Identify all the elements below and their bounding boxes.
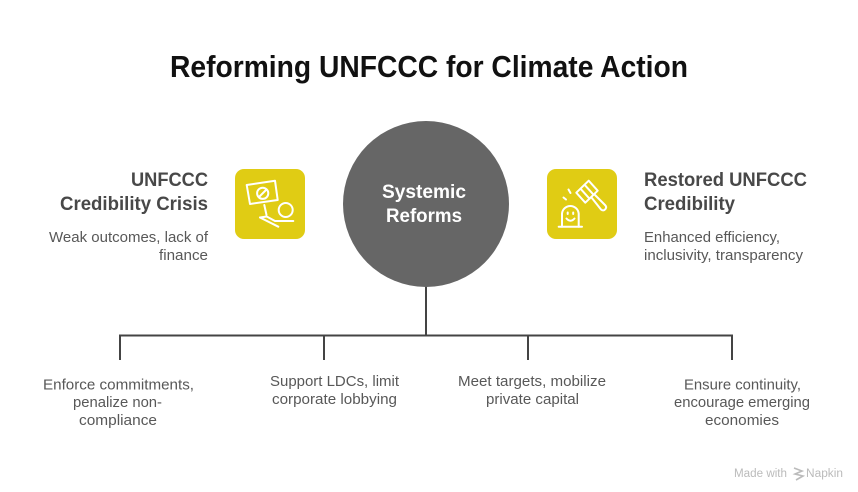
reform 4 text: Ensure continuity,	[684, 378, 801, 394]
right heading: Restored UNFCCC Credibility: Restored UNFCCC	[644, 170, 807, 191]
title: Reforming UNFCCC for Climate Action	[170, 50, 688, 84]
reform 3 text	[458, 374, 606, 408]
right description	[644, 230, 804, 264]
central circle: systemic reforms: Reforms	[386, 206, 462, 227]
reform 3 text: private capital	[486, 392, 579, 408]
reform 2 text	[270, 374, 399, 408]
left description	[49, 230, 209, 264]
left heading: UNFCCC Credibility Crisis	[60, 170, 208, 215]
right heading: Restored UNFCCC Credibility	[644, 170, 807, 215]
left description: Weak outcomes, lack of	[49, 230, 209, 246]
right description: Enhanced efficiency,	[644, 230, 780, 246]
tree connector lines	[120, 286, 732, 360]
reform 4 text: economies	[705, 413, 779, 429]
reform 2 text: corporate lobbying	[272, 392, 397, 408]
right description: inclusivity, transparency	[644, 248, 804, 264]
reform 3 text: Meet targets, mobilize	[458, 374, 606, 390]
central circle: systemic reforms: Systemic	[382, 182, 466, 203]
icon: gavel and smiling bell	[547, 169, 617, 239]
icon: protest sign and fallen person	[235, 169, 305, 239]
central circle: systemic reforms	[343, 121, 509, 287]
left description: finance	[159, 248, 208, 264]
reform 1 text	[43, 378, 194, 429]
left heading: UNFCCC Credibility Crisis: UNFCCC	[131, 170, 208, 191]
reform 1 text: Enforce commitments,	[43, 378, 194, 394]
reform 4 text	[674, 378, 810, 429]
left heading: UNFCCC Credibility Crisis: Credibility Crisis	[60, 194, 208, 215]
watermark: made with Napkin	[734, 468, 843, 480]
reform 1 text: penalize non-	[73, 395, 162, 411]
reform 1 text: compliance	[79, 413, 157, 429]
watermark: made with Napkin: Napkin	[806, 468, 843, 480]
watermark: made with Napkin: Made with	[734, 468, 787, 480]
right heading: Restored UNFCCC Credibility: Credibility	[644, 194, 735, 215]
reform 2 text: Support LDCs, limit	[270, 374, 399, 390]
reform 4 text: encourage emerging	[674, 395, 810, 411]
